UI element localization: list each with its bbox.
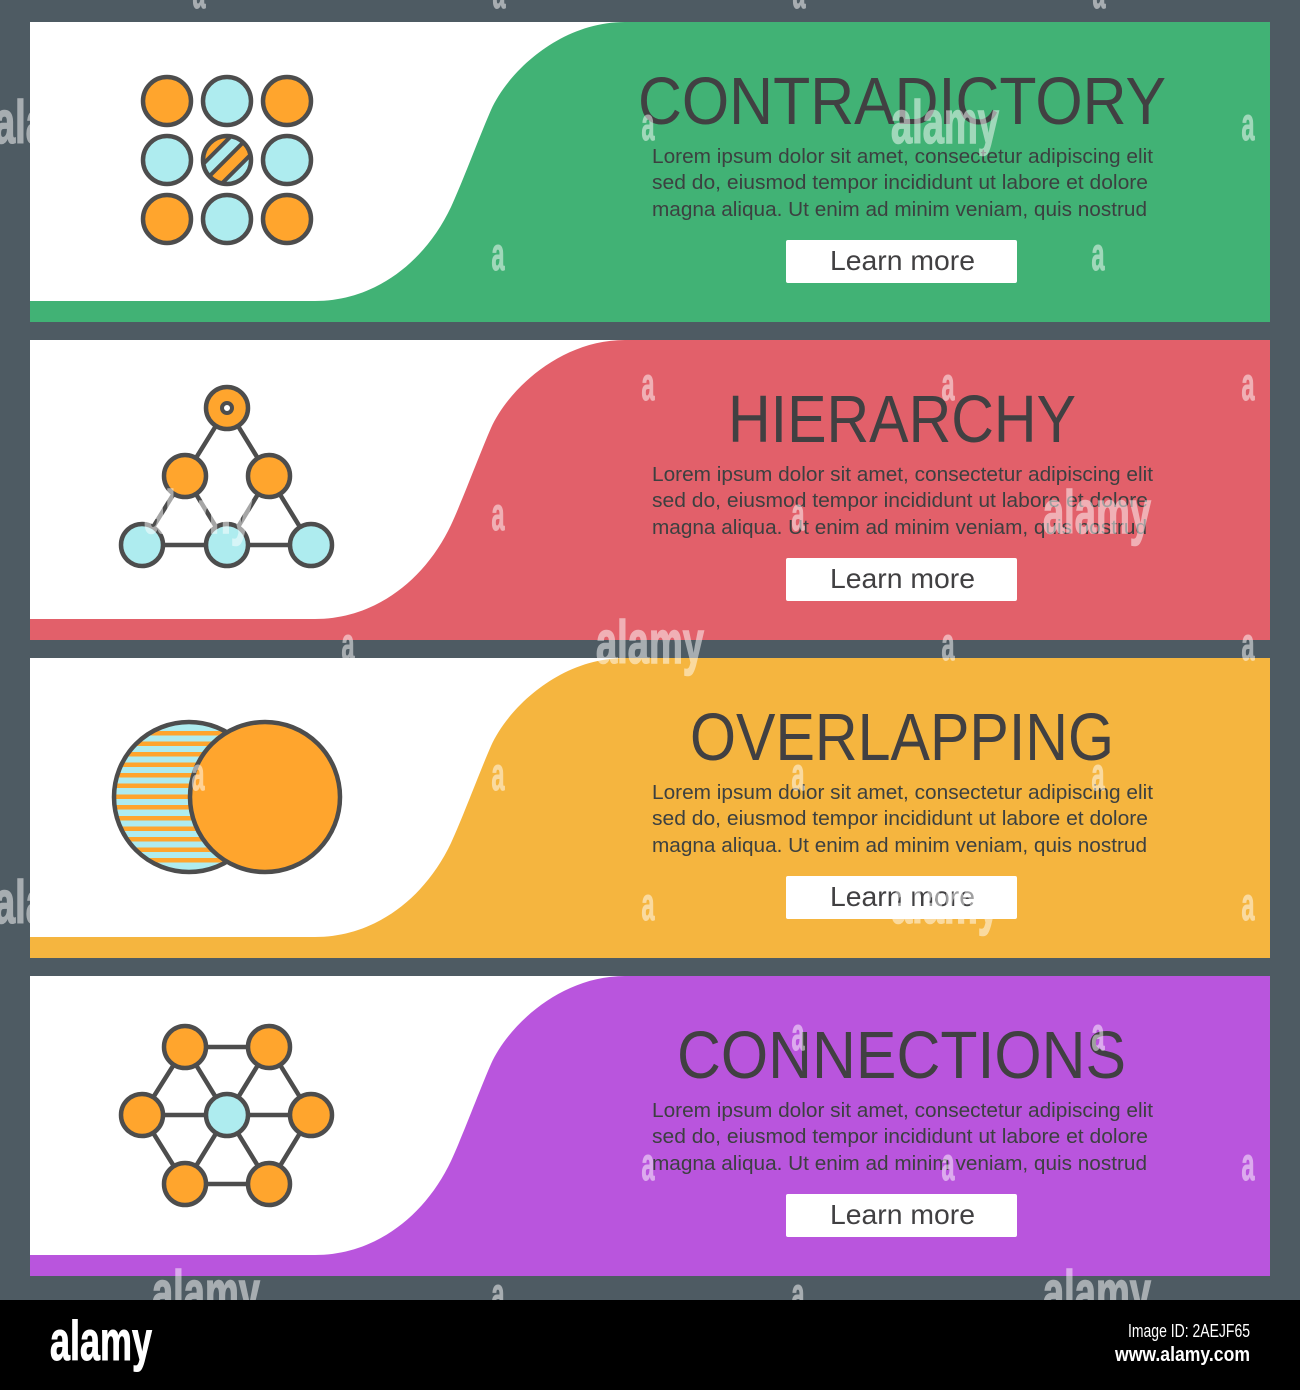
body text — [652, 464, 1153, 539]
body text — [652, 782, 1153, 857]
body text: magna aliqua. Ut enim ad minim veniam, quis nostrud — [652, 199, 1147, 221]
icon: overlapping circles — [112, 720, 340, 874]
watermark overlay: a — [1092, 748, 1105, 800]
body text: Lorem ipsum dolor sit amet, consectetur adipiscing elit — [652, 146, 1153, 168]
watermark overlay: a — [492, 228, 505, 280]
watermark overlay: a — [792, 1008, 805, 1060]
watermark overlay: a — [792, 1268, 805, 1320]
red wave shape — [30, 340, 1270, 640]
yellow wave shape — [30, 658, 1270, 958]
body text: Lorem ipsum dolor sit amet, consectetur adipiscing elit — [652, 1100, 1153, 1122]
body text: sed do, eiusmod tempor incididunt ut labore et dolore — [652, 490, 1148, 512]
purple wave shape — [30, 976, 1270, 1276]
button — [786, 876, 1017, 919]
footer logo: alamy — [50, 1309, 152, 1372]
website: www.alamy.com — [1114, 1344, 1250, 1366]
body text — [652, 1100, 1153, 1175]
watermark overlay: a — [642, 878, 655, 930]
heading: CONNECTIONS — [677, 1018, 1126, 1093]
body text: Lorem ipsum dolor sit amet, consectetur adipiscing elit — [652, 782, 1153, 804]
panel: overlapping banner — [30, 658, 1270, 958]
icon: triangle hierarchy — [121, 387, 332, 566]
watermark overlay: alamy — [152, 1259, 260, 1326]
body text: sed do, eiusmod tempor incididunt ut labore et dolore — [652, 172, 1148, 194]
watermark overlay: a — [942, 1138, 955, 1190]
watermark overlay: a — [792, 488, 805, 540]
watermark overlay: alamy — [1043, 1259, 1151, 1326]
body text: magna aliqua. Ut enim ad minim veniam, quis nostrud — [652, 835, 1147, 857]
button: Learn more — [830, 245, 975, 276]
body text: magna aliqua. Ut enim ad minim veniam, quis nostrud — [652, 1153, 1147, 1175]
button — [786, 1194, 1017, 1237]
watermark overlay: a — [492, 748, 505, 800]
watermark overlay: a — [942, 358, 955, 410]
watermark overlay: a — [642, 1138, 655, 1190]
panel: connections banner — [30, 976, 1270, 1276]
button: Learn more — [830, 563, 975, 594]
watermark overlay: alamy — [596, 609, 704, 676]
watermark overlay: a — [1242, 618, 1255, 670]
watermark overlay: a — [192, 748, 205, 800]
watermark overlay: a — [1242, 1138, 1255, 1190]
icon: connected hexagon network — [121, 1026, 332, 1205]
watermark overlay: a — [1242, 878, 1255, 930]
banner base — [30, 976, 1270, 1276]
watermark overlay: alamy — [144, 479, 252, 546]
watermark overlay: a — [492, 488, 505, 540]
banner base — [30, 22, 1270, 322]
button — [786, 558, 1017, 601]
watermark overlay: a — [342, 618, 355, 670]
icon: grid of circles — [143, 77, 311, 243]
watermark overlay: alamy — [1043, 479, 1151, 546]
footer bar — [0, 1300, 1300, 1390]
body text — [652, 146, 1153, 221]
button — [786, 240, 1017, 283]
banner base — [30, 658, 1270, 958]
body text: sed do, eiusmod tempor incididunt ut labore et dolore — [652, 808, 1148, 830]
watermark overlay: a — [492, 1268, 505, 1320]
button: Learn more — [830, 1199, 975, 1230]
watermark overlay: a — [792, 748, 805, 800]
heading: OVERLAPPING — [690, 700, 1114, 775]
banner base — [30, 340, 1270, 640]
watermark overlay: a — [1242, 98, 1255, 150]
heading: CONTRADICTORY — [638, 64, 1166, 139]
watermark overlay: alamy — [891, 89, 999, 156]
watermark overlay: alamy — [891, 869, 999, 936]
panel: hierarchy banner — [30, 340, 1270, 640]
body text: magna aliqua. Ut enim ad minim veniam, quis nostrud — [652, 517, 1147, 539]
green wave shape — [30, 22, 1270, 322]
watermark overlay: a — [1092, 1008, 1105, 1060]
body text: Lorem ipsum dolor sit amet, consectetur adipiscing elit — [652, 464, 1153, 486]
body text: sed do, eiusmod tempor incididunt ut labore et dolore — [652, 1126, 1148, 1148]
button: Learn more — [830, 881, 975, 912]
image id: Image ID: 2AEJF65 — [1128, 1321, 1250, 1341]
watermark overlay: a — [642, 358, 655, 410]
watermark overlay: a — [1242, 358, 1255, 410]
watermark overlay: a — [942, 618, 955, 670]
watermark overlay: a — [1092, 228, 1105, 280]
heading: HIERARCHY — [728, 382, 1076, 457]
panel: contradictory banner — [30, 22, 1270, 322]
watermark overlay: a — [642, 98, 655, 150]
